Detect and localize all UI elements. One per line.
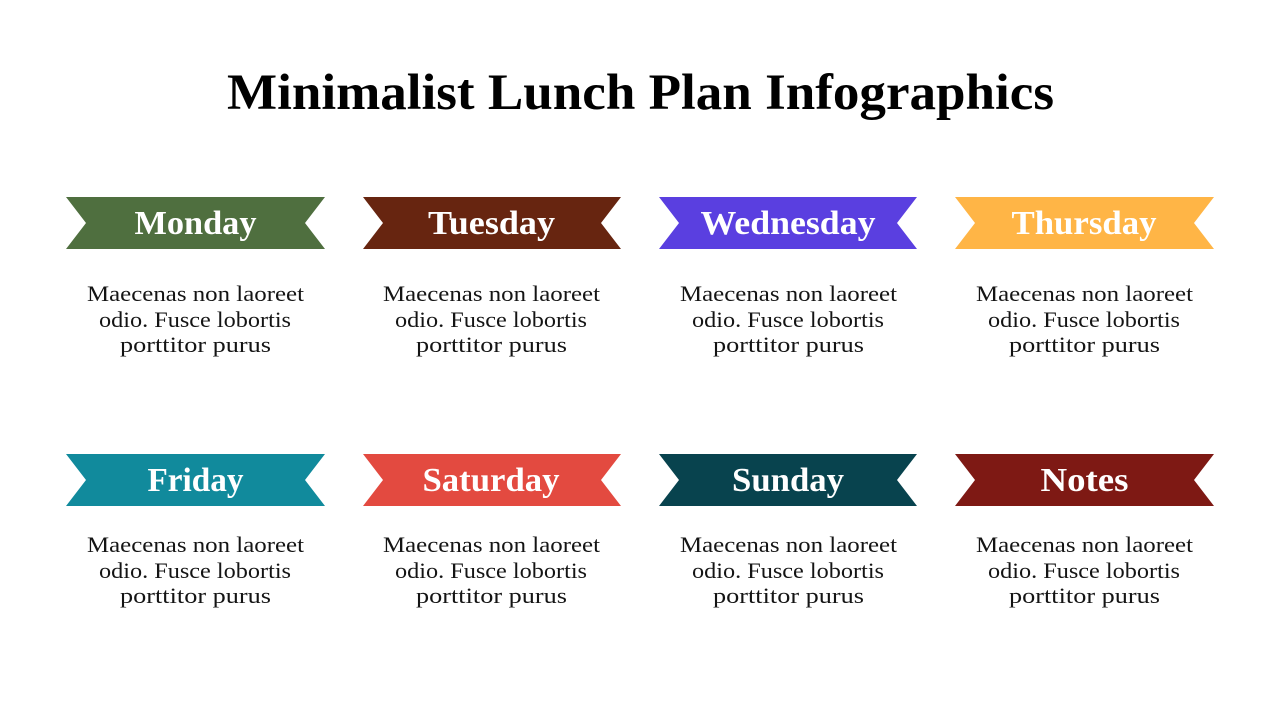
heading: Notes: Notes (1040, 462, 1128, 499)
text block: Notes (976, 532, 1194, 608)
text block: Friday: porttitor purus (120, 583, 271, 608)
text block: Tuesday: odio. Fusce lobortis (395, 307, 587, 332)
ribbon: Tuesday (363, 197, 621, 249)
text block: Friday: odio. Fusce lobortis (99, 558, 291, 583)
text block: Wednesday: odio. Fusce lobortis (692, 307, 884, 332)
text block: Saturday: Maecenas non laoreet (383, 532, 601, 557)
text block: Monday: odio. Fusce lobortis (99, 307, 291, 332)
text block: Wednesday: porttitor purus (713, 332, 864, 357)
heading: Monday: Monday (134, 205, 256, 242)
heading: Tuesday: Tuesday (428, 205, 555, 242)
text block: Thursday: Maecenas non laoreet (976, 281, 1194, 306)
text block: Friday: Maecenas non laoreet (87, 532, 305, 557)
ribbon: Friday (66, 454, 325, 506)
text block: Tuesday (383, 281, 601, 357)
text block: Saturday: odio. Fusce lobortis (395, 558, 587, 583)
text block: Monday: Maecenas non laoreet (87, 281, 305, 306)
panel: Saturday (363, 454, 621, 608)
heading: Thursday: Thursday (1012, 205, 1156, 242)
text block: Wednesday: Maecenas non laoreet (680, 281, 898, 306)
text block: Notes: porttitor purus (1009, 583, 1160, 608)
text block: Friday (87, 532, 305, 608)
ribbon: Saturday (363, 454, 621, 506)
ribbon: Thursday (955, 197, 1214, 249)
heading: Wednesday: Wednesday (700, 205, 876, 242)
text block: Saturday: porttitor purus (416, 583, 567, 608)
text block: Notes: odio. Fusce lobortis (988, 558, 1180, 583)
panel: Sunday (659, 454, 917, 608)
text block: Monday: porttitor purus (120, 332, 271, 357)
text block: Tuesday: Maecenas non laoreet (383, 281, 601, 306)
text block: Wednesday (680, 281, 898, 357)
text block: Tuesday: porttitor purus (416, 332, 567, 357)
text block: Sunday: porttitor purus (713, 583, 864, 608)
text block: Thursday (976, 281, 1194, 357)
text block: Saturday (383, 532, 601, 608)
ribbon: Notes (955, 454, 1214, 506)
ribbon: Sunday (659, 454, 917, 506)
panel: Thursday (955, 197, 1214, 357)
panel: Tuesday (363, 197, 621, 357)
text block: Sunday: odio. Fusce lobortis (692, 558, 884, 583)
text block: Notes: Maecenas non laoreet (976, 532, 1194, 557)
heading: Friday: Friday (148, 462, 244, 499)
panel: Friday (66, 454, 325, 608)
panel: Notes (955, 454, 1214, 608)
text block: Thursday: odio. Fusce lobortis (988, 307, 1180, 332)
panel: Monday (66, 197, 325, 357)
text block: Sunday (680, 532, 898, 608)
title: Minimalist Lunch Plan Infographics (227, 65, 1054, 121)
text block: Thursday: porttitor purus (1009, 332, 1160, 357)
text block: Monday (87, 281, 305, 357)
heading: Saturday: Saturday (422, 462, 560, 499)
ribbon: Wednesday (659, 197, 917, 249)
panel: Wednesday (659, 197, 917, 357)
heading: Sunday: Sunday (732, 462, 844, 499)
text block: Sunday: Maecenas non laoreet (680, 532, 898, 557)
ribbon: Monday (66, 197, 325, 249)
